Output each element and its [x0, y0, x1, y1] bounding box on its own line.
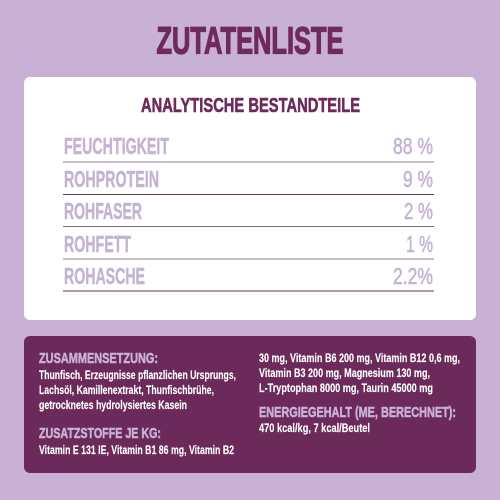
text: composition list: Lachsöl, Kamillenextrakt, Thunfischbrühe,	[39, 385, 214, 397]
text: additives list continued	[259, 353, 460, 395]
text: additives list continued: Vitamin B3 200 mg, Magnesium 130 mg,	[259, 368, 430, 380]
row: crude fibre: 2 %	[404, 198, 433, 224]
text: additives list start: Vitamin E 131 IE, Vitamin B1 86 mg, Vitamin B2	[39, 445, 234, 457]
row: crude ash: ROHASCHE	[64, 263, 145, 289]
text: composition list	[39, 370, 236, 412]
row: crude protein: ROHPROTEIN	[64, 166, 159, 192]
heading: composition: ZUSAMMENSETZUNG:	[39, 351, 158, 367]
row: crude protein: 9 %	[403, 166, 433, 192]
row: crude fat: 1 %	[406, 231, 433, 257]
row: crude ash: 2.2%	[393, 263, 433, 289]
row: moisture: 88 %	[393, 133, 433, 159]
row: moisture: FEUCHTIGKEIT	[64, 133, 169, 159]
heading: analytical constituents: ANALYTISCHE BESTANDTEILE	[141, 94, 360, 117]
row: crude fibre	[63, 198, 434, 226]
text: composition list: Thunfisch, Erzeugnisse pflanzlichen Ursprungs,	[39, 370, 236, 382]
text: composition list: getrocknetes hydrolysiertes Kasein	[39, 400, 187, 412]
heading: additives: ZUSATZSTOFFE JE KG:	[39, 426, 161, 442]
row: crude fat: ROHFETT	[64, 231, 131, 257]
text: energy values: 470 kcal/kg, 7 kcal/Beutel	[259, 423, 370, 435]
row: crude ash	[63, 263, 434, 291]
panel: analytical constituents	[24, 77, 476, 320]
row: crude protein	[63, 166, 434, 194]
row: crude fat	[63, 231, 434, 259]
title: ZUTATENLISTE	[156, 20, 344, 62]
text: additives list continued: L-Tryptophan 8000 mg, Taurin 45000 mg	[259, 383, 433, 395]
row: crude fibre: ROHFASER	[64, 198, 142, 224]
panel: composition and additives	[24, 336, 476, 473]
row: moisture	[63, 133, 434, 162]
